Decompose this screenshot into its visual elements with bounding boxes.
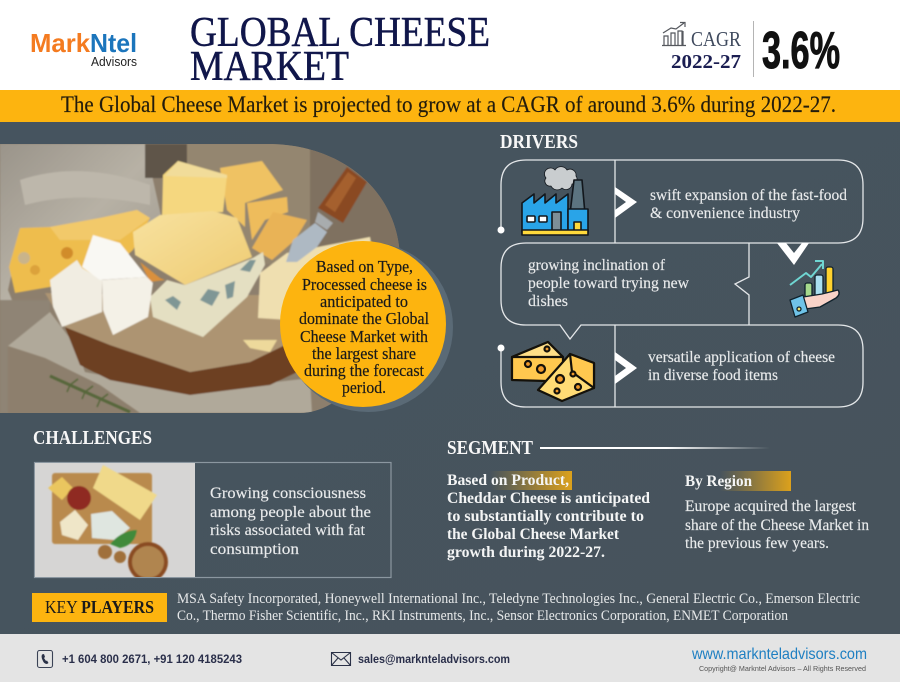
text: driver 2: people toward trying new <box>528 275 689 292</box>
text: driver 1: & convenience industry <box>650 205 800 222</box>
callout circle: processed cheese: dominate the Global <box>299 309 429 328</box>
icon: cheese wedges <box>512 342 594 401</box>
heading: drivers: DRIVERS <box>500 131 578 153</box>
logo: MarkNtel Advisors: Advisors <box>91 54 137 69</box>
callout circle: processed cheese: period. <box>342 378 386 397</box>
icon: hand with chart <box>790 261 839 317</box>
text: driver 3 <box>648 349 835 384</box>
arrow: driver 1 <box>615 187 637 218</box>
segment: by region: the previous few years. <box>685 535 829 552</box>
arrow: driver 2 <box>777 243 809 265</box>
text: challenge: among people about the <box>210 504 371 521</box>
segment: by product: Cheddar Cheese is anticipated <box>447 490 650 507</box>
arrow: driver 3 <box>615 352 637 384</box>
segment: by region: share of the Cheese Market in <box>685 517 869 534</box>
contact: phone <box>38 650 242 668</box>
headline banner: The Global Cheese Market is projected to grow at a CAGR of around 3.6% during 2022-27. <box>61 92 836 117</box>
CAGR block: CAGR <box>691 27 741 51</box>
callout circle: processed cheese: Processed cheese is <box>302 275 427 294</box>
key players list <box>177 591 860 624</box>
website and copyright: Copyright@ Markntel Advisors – All Rights Reserved <box>699 664 866 673</box>
drivers flow panel <box>498 160 863 407</box>
callout circle: processed cheese <box>280 241 453 412</box>
segment: by product: growth during 2022-27. <box>447 544 605 561</box>
footer bar <box>0 634 900 682</box>
logo: MarkNtel Advisors <box>30 28 137 69</box>
contact: email: sales@marknteladvisors.com <box>358 652 510 666</box>
text: driver 2: dishes <box>528 293 568 310</box>
text: driver 3: in diverse food items <box>648 367 778 384</box>
segment: by product: to substantially contribute to <box>447 508 644 525</box>
callout circle: processed cheese: during the forecast <box>304 361 424 380</box>
callout circle: processed cheese: Cheese Market with <box>300 327 429 346</box>
text: driver 2 <box>528 257 689 310</box>
photo: cheese board <box>0 144 410 414</box>
segment: by region: Europe acquired the largest <box>685 498 857 515</box>
CAGR block: 3.6% <box>762 22 840 80</box>
segment: by region: By Region <box>685 473 752 490</box>
title: MARKET <box>190 44 349 90</box>
callout circle: processed cheese: Based on Type, <box>316 257 413 276</box>
segment: by product <box>447 471 650 561</box>
CAGR block: 2022-27 <box>671 51 741 73</box>
icon: phone <box>38 650 52 668</box>
website and copyright: www.marknteladvisors.com <box>691 646 867 663</box>
logo: MarkNtel Advisors: Ntel <box>90 28 137 58</box>
key players list: Co., Thermo Fisher Scientific, Inc., RKI Instruments, Inc., Sensor Electronics Corporation, ENMET Corporation <box>177 608 788 624</box>
key players label <box>32 593 167 622</box>
text: driver 3: versatile application of cheese <box>648 349 835 366</box>
heading: segment: SEGMENT <box>447 437 534 459</box>
callout circle: processed cheese: anticipated to <box>320 292 408 311</box>
key players label: KEY PLAYERS <box>45 597 154 617</box>
text: driver 1: swift expansion of the fast-food <box>650 187 847 204</box>
title <box>190 10 490 90</box>
text: driver 1 <box>650 187 847 222</box>
segment: by product: Based on Product, <box>447 472 569 489</box>
website and copyright <box>691 646 867 673</box>
icon: factory <box>522 167 588 235</box>
heading: challenges: CHALLENGES <box>33 427 152 449</box>
text: challenge: risks associated with fat <box>210 522 366 539</box>
icon: growth chart <box>662 22 686 46</box>
logo: MarkNtel Advisors: Mark <box>30 28 91 58</box>
icon: envelope <box>332 652 350 666</box>
connecting frame <box>501 160 863 407</box>
text: challenge: consumption <box>210 541 299 558</box>
photo: cheese platter <box>34 462 196 582</box>
segment: by product: the Global Cheese Market <box>447 526 620 543</box>
dark main panel <box>0 122 900 634</box>
CAGR block <box>662 21 840 80</box>
contact: phone: +1 604 800 2671, +91 120 4185243 <box>62 652 242 666</box>
title: GLOBAL CHEESE <box>190 10 490 56</box>
text: challenge: Growing consciousness <box>210 485 366 502</box>
panel: challenges <box>34 462 391 582</box>
segment: by region <box>685 471 869 552</box>
text: driver 2: growing inclination of <box>528 257 666 274</box>
text: challenge <box>210 485 371 558</box>
callout circle: processed cheese: the largest share <box>312 344 416 363</box>
